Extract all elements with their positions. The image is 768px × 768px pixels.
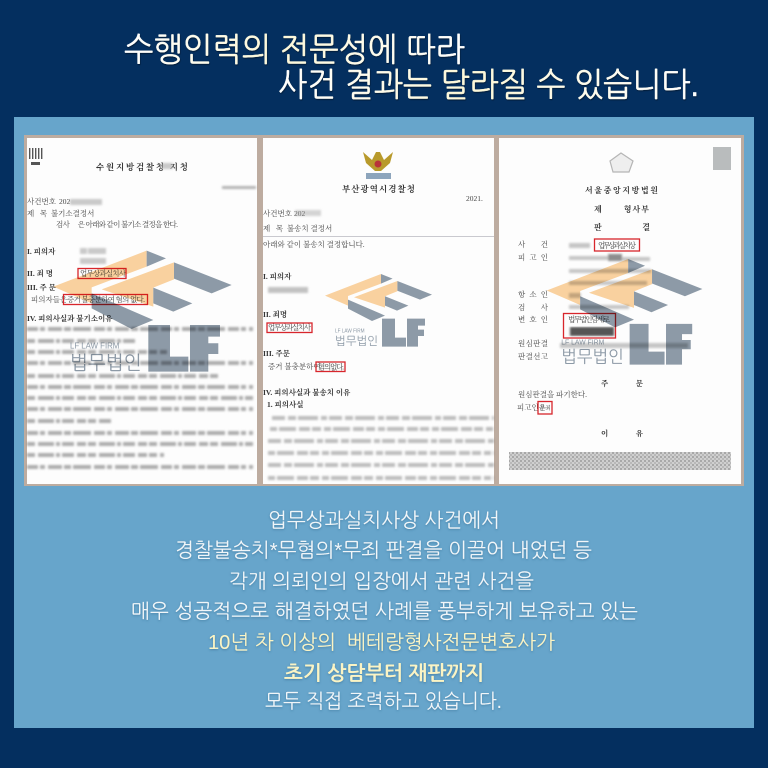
watermark: LF law firm <box>547 259 702 367</box>
case info: 판결선고 <box>518 351 549 361</box>
case info: 증거 불충분하여 <box>268 361 321 371</box>
highlighted case name <box>594 239 640 251</box>
redacted body text <box>27 163 256 467</box>
icon: court emblem <box>610 153 633 172</box>
case info: 2021. <box>466 194 483 203</box>
document: police decision <box>263 138 494 484</box>
case info: 검사 은 아래와 같이 불기소 결정을 한다. <box>56 219 178 229</box>
case info <box>517 239 644 438</box>
highlighted defense counsel: 법무법인 담세로 <box>568 314 611 324</box>
body text: 업무상과실치사상 사건에서 <box>268 510 500 532</box>
case info: 202 <box>294 209 306 218</box>
case info: 변호인 <box>518 314 548 324</box>
case info: 원심판결 <box>518 338 548 348</box>
highlighted charge: 업무상과실치사 <box>80 268 127 278</box>
highlighted verdict <box>538 402 552 414</box>
document: court judgment <box>499 138 741 484</box>
heading: court name: 서울중앙지방법원 <box>585 185 658 195</box>
case info: 제 목 불기소결정서 <box>27 208 94 218</box>
highlight: experienced attorneys: 10년 차 이상의 베테랑형사전문변호사가 <box>208 632 555 654</box>
title: 사건 결과는 달라질 수 있습니다. <box>278 66 699 103</box>
stamp <box>713 147 731 170</box>
highlighted disposition: 증거 불충분하여 혐의 없다. <box>67 294 145 304</box>
case info: 사건번호 <box>263 208 293 218</box>
redacted info <box>560 243 688 348</box>
case info: 주 문 <box>601 379 644 388</box>
rule line <box>263 236 494 237</box>
case info: 피고인은 <box>517 402 547 412</box>
case info: 이 유 <box>601 428 644 438</box>
scan noise block <box>509 452 731 470</box>
heading: court name: 판 결 <box>594 222 650 232</box>
heading: court name: 제 형사부 <box>594 204 649 214</box>
body text: 각개 의뢰인의 입장에서 관련 사건을 <box>229 571 534 593</box>
case info: III. 주문 <box>263 349 291 358</box>
panel: document frame <box>24 135 744 486</box>
case info: II. 죄명 <box>263 309 287 319</box>
case info: III. 주 문 <box>27 283 57 292</box>
body text: 매우 성공적으로 해결하였던 사례를 풍부하게 보유하고 있는 <box>131 601 638 623</box>
panel: light blue content card <box>14 117 754 728</box>
title <box>124 31 699 103</box>
case info: 검 사 <box>518 302 549 312</box>
case info: 항소인 <box>518 289 548 299</box>
case info: 피의자들은 <box>31 294 68 304</box>
highlighted case name: 업무상과실치상 <box>598 240 637 250</box>
case info: IV. 피의사실과 불기소이유 <box>27 313 113 323</box>
case info: IV. 피의사실과 불송치 이유 <box>263 387 351 397</box>
redacted body text <box>268 210 494 478</box>
case info: 아래와 같이 불송치 결정합니다. <box>263 239 365 249</box>
case info <box>27 196 178 323</box>
highlighted disposition: 혐의없다. <box>318 362 344 372</box>
body text: 모두 직접 조력하고 있습니다. <box>265 691 502 713</box>
highlight: consultation to trial: 초기 상담부터 재판까지 <box>284 663 484 685</box>
case info <box>263 194 483 409</box>
case info: I. 피의자 <box>263 271 292 281</box>
icon: police emblem <box>363 152 393 179</box>
heading: office name: 수원지방검찰청 지청 <box>96 162 188 172</box>
body text <box>131 510 638 713</box>
title: 수행인력의 전문성에 따라 <box>124 31 465 68</box>
case info: 사 건 <box>518 239 548 249</box>
heading: court name <box>585 185 658 232</box>
highlighted verdict: 무죄 <box>540 404 551 412</box>
case info: 원심판결을 파기한다. <box>518 389 587 399</box>
highlighted defense counsel <box>564 314 616 338</box>
case info: I. 피의자 <box>27 246 56 256</box>
document: prosecutor decision <box>27 138 257 484</box>
watermark: LF law firm <box>325 274 432 348</box>
case info: 1. 피의사실 <box>267 399 303 409</box>
body text: 경찰불송치*무혐의*무죄 판결을 이끌어 내었던 등 <box>175 540 592 562</box>
case info: 202 <box>59 197 70 206</box>
case info: 피고인 <box>518 252 548 262</box>
heading: office name: 부산광역시경찰청 <box>342 184 415 194</box>
highlighted charge: 업무상과실치사 <box>268 322 312 332</box>
watermark: LF law firm <box>53 251 232 374</box>
case info: II. 죄 명 <box>27 268 53 278</box>
case info: 제 목 불송치 결정서 <box>263 223 332 233</box>
case info: 사건번호 <box>27 196 57 206</box>
icon: prosecutor emblem <box>29 148 42 165</box>
